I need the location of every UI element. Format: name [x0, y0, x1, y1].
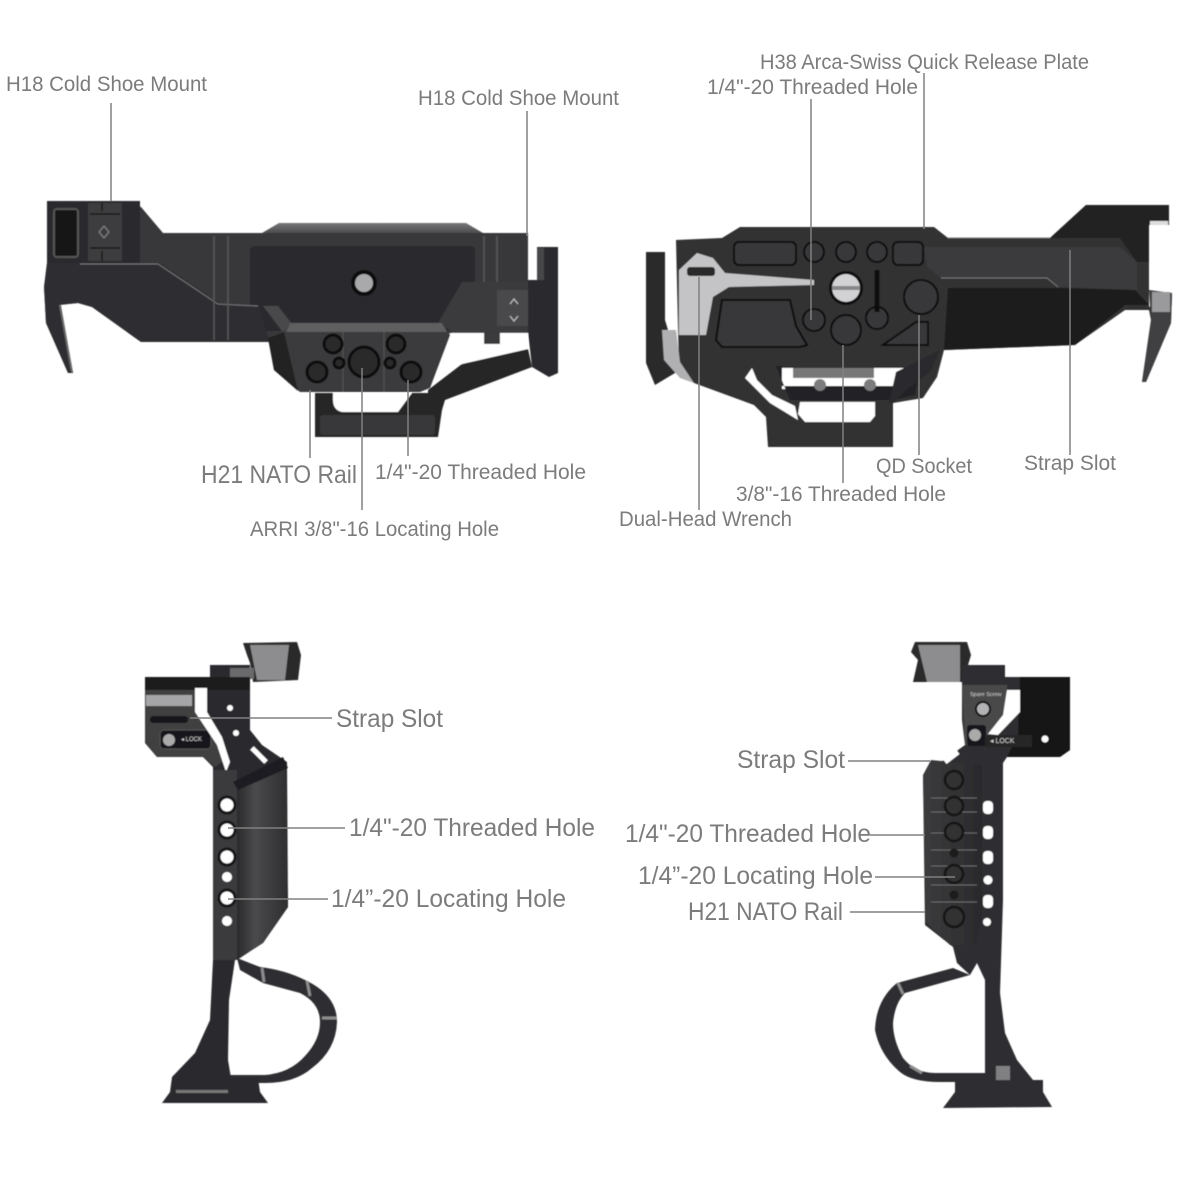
- right shoe face: [497, 290, 530, 326]
- label: NATO rail: H21 NATO Rail: [201, 461, 357, 489]
- product: side view right: [875, 642, 1070, 1108]
- head plate: [145, 690, 225, 767]
- left slash cutout: [745, 368, 798, 420]
- light slot: [146, 695, 192, 706]
- small block under wing: [484, 333, 500, 344]
- label: strap slot top: Strap Slot: [1024, 452, 1116, 475]
- recessed panel: [250, 246, 475, 331]
- plate top strip: [286, 323, 447, 332]
- body vertical highlights: [214, 236, 497, 340]
- shoe face: [250, 645, 289, 680]
- label: strap slot left: Strap Slot: [336, 705, 443, 733]
- cable slot: [54, 209, 78, 257]
- bracket face: [320, 415, 435, 435]
- spare screw: [970, 692, 1002, 716]
- right wing: [438, 282, 532, 332]
- arm body: [923, 665, 1070, 1108]
- rail small holes: [950, 848, 958, 900]
- top shoe: [243, 642, 301, 682]
- left block: [47, 201, 140, 263]
- strip body: [213, 770, 237, 960]
- white cutout: [988, 690, 1020, 735]
- label: locating hole right: 1/4”-20 Locating Hole: [638, 862, 873, 890]
- side hook: [1142, 290, 1172, 382]
- top shoe: [911, 642, 971, 682]
- product: side view left: [145, 642, 337, 1103]
- product: cage top view right: [646, 205, 1172, 447]
- label: threaded hole right: 1/4"-20 Threaded Hole: [625, 820, 871, 848]
- back plate: [262, 223, 483, 233]
- head: [145, 665, 288, 1103]
- ring grip: [875, 968, 990, 1082]
- lower bay cutout: [798, 402, 875, 422]
- label: H18 cold shoe left: H18 Cold Shoe Mount: [6, 73, 207, 96]
- upper bar: [145, 677, 250, 690]
- lower wing: [44, 263, 270, 373]
- label: threaded hole top: 1/4"-20 Threaded Hole: [707, 76, 918, 99]
- nato rail plate: [923, 760, 982, 945]
- hook highlight: [1152, 292, 1170, 312]
- wing highlight: [80, 264, 258, 306]
- ring highlight: [898, 983, 922, 1073]
- label: H38 plate: H38 Arca-Swiss Quick Release Plate: [760, 51, 1089, 74]
- lock badge: [160, 730, 211, 749]
- label: locating hole left: 1/4”-20 Locating Hole: [331, 885, 566, 913]
- hook highlight: [60, 305, 72, 372]
- bracket cutout: [333, 393, 412, 412]
- rear block: [1050, 205, 1169, 262]
- dark slot: [150, 716, 188, 723]
- inner grey plate: [793, 368, 874, 378]
- cold shoe slots: [90, 203, 120, 261]
- leader lines: [111, 73, 1070, 912]
- support arm: [315, 349, 532, 437]
- window cutout: [782, 368, 907, 389]
- rear block highlight: [1150, 221, 1168, 225]
- plate recesses: [716, 242, 938, 347]
- lower plate side: [268, 332, 298, 391]
- main body: [676, 205, 1172, 447]
- rear block: [1007, 677, 1070, 757]
- upper panel: [924, 247, 1137, 290]
- small holes: [222, 705, 239, 926]
- rail holes: [944, 771, 964, 927]
- rail lines: [931, 798, 977, 902]
- label: ARRI hole: ARRI 3/8"-16 Locating Hole: [250, 518, 499, 541]
- dark lower body: [944, 288, 1149, 350]
- label: H18 cold shoe right: H18 Cold Shoe Mount: [418, 87, 619, 110]
- window screws: [814, 379, 876, 391]
- plate holes: [307, 335, 421, 382]
- side holes: [219, 797, 235, 906]
- spare screw: Spare Screw: [970, 692, 1002, 698]
- left plate wing: [263, 306, 295, 335]
- lock lever: ◂ LOCK: [990, 738, 1015, 745]
- foot slot: [176, 1090, 228, 1093]
- left clamp: [646, 252, 680, 385]
- side holes: [983, 801, 993, 926]
- slot: [874, 270, 880, 312]
- ring grip: [230, 958, 337, 1083]
- grip ledge: [233, 757, 288, 790]
- centre screw: [351, 270, 377, 296]
- white slit: [252, 748, 266, 762]
- frame: [776, 366, 920, 400]
- label: wrench: Dual-Head Wrench: [619, 508, 792, 531]
- grip bulge: [237, 762, 288, 960]
- plate lines: [343, 332, 384, 392]
- right clamp: [528, 247, 558, 377]
- screw plate: [962, 685, 1007, 745]
- top bar highlight: [230, 668, 254, 679]
- foot screw: [996, 1066, 1010, 1080]
- rear hole: [1042, 736, 1048, 742]
- main body: [44, 201, 528, 373]
- dual-head wrench: [679, 253, 814, 335]
- label: strap slot right: Strap Slot: [737, 746, 845, 774]
- lower plate: [268, 323, 450, 392]
- shoe mark: [99, 226, 109, 238]
- lock badge: ◂ LOCK: [181, 737, 202, 743]
- white cutout: [195, 688, 230, 772]
- wrench slot: [687, 267, 715, 276]
- shoe face: [918, 645, 960, 682]
- arm diagonal: [889, 350, 940, 403]
- white slit: [945, 752, 958, 762]
- label: 3/8 hole: 3/8"-16 Threaded Hole: [736, 483, 946, 506]
- quick release hole: [829, 271, 863, 305]
- white gap below wing: [451, 333, 528, 364]
- label: QD socket: QD Socket: [876, 455, 972, 478]
- right shoe mark: [510, 299, 518, 321]
- panel highlight: [941, 238, 1058, 287]
- cold shoe face: [88, 203, 122, 261]
- clamp highlight: [537, 248, 544, 280]
- clamp metal highlight: [662, 330, 694, 383]
- lock lever: [967, 725, 1032, 747]
- label: threaded hole left: 1/4"-20 Threaded Hole: [349, 814, 595, 842]
- product: cage top view left: [44, 201, 558, 437]
- ring highlight: [262, 968, 337, 1018]
- label: threaded hole: 1/4"-20 Threaded Hole: [375, 461, 586, 484]
- label: NATO rail right: H21 NATO Rail: [688, 898, 843, 926]
